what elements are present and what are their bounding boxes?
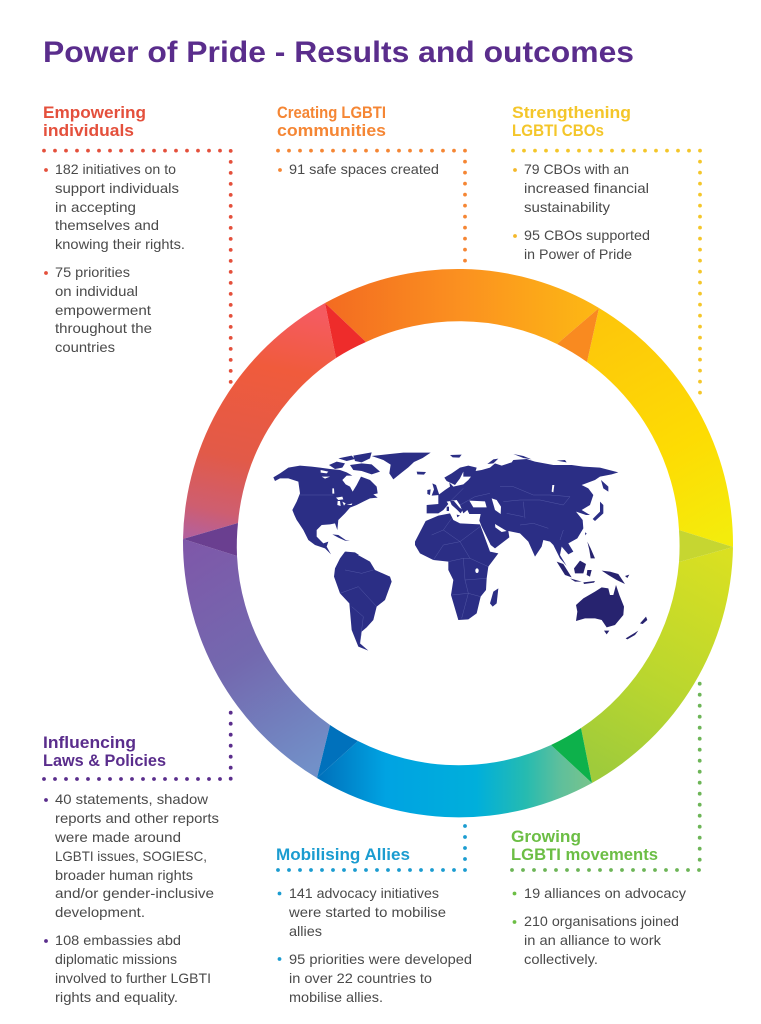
bullet list: in over 22 countries to: [289, 970, 432, 986]
bullet list: empowerment: [55, 302, 151, 318]
ring segment: lime: [581, 547, 733, 783]
Africa: [415, 513, 498, 620]
heading: [277, 103, 386, 140]
ring fold: orange: [557, 308, 599, 362]
heading: individuals: [43, 121, 134, 140]
bullet list: and/or gender-inclusive: [55, 885, 214, 901]
heading: [43, 103, 146, 140]
country borders: [300, 487, 570, 643]
bullet list: knowing their rights.: [55, 236, 185, 252]
bullet list: diplomatic missions: [55, 951, 177, 967]
bullet list: 91 safe spaces created: [289, 161, 439, 177]
bullet list: [44, 161, 185, 355]
world map: [257, 452, 647, 651]
panel: creating LGBTI communities: [277, 103, 439, 177]
heading: Influencing: [43, 733, 136, 752]
North America: [257, 452, 380, 555]
ring fold: lime: [679, 530, 733, 562]
Oceania and Southeast Asia: [557, 542, 647, 639]
ring segment: purple: [183, 539, 330, 778]
panel: strengthening LGBTI CBOs: [512, 103, 650, 262]
bullet list: 95 priorities were developed: [289, 951, 472, 967]
bullet list: themselves and: [55, 217, 159, 233]
panel: growing LGBTI movements: [511, 827, 686, 967]
heading: [43, 733, 166, 770]
heading: Strengthening: [512, 103, 631, 122]
bullet list: throughout the: [55, 320, 152, 336]
bullet list: increased financial: [524, 180, 649, 196]
bullet list: 79 CBOs with an: [524, 161, 629, 177]
panel: mobilising allies: [276, 845, 472, 1005]
panel: empowering individuals: [43, 103, 185, 355]
heading: communities: [277, 121, 386, 140]
bullet list: were made around: [54, 829, 181, 845]
heading: Laws & Policies: [43, 751, 166, 770]
bullet list: [44, 791, 219, 1005]
bullet list: 40 statements, shadow: [55, 791, 209, 807]
bullet list: support individuals: [55, 180, 179, 196]
dotted connector: influencing laws: [44, 702, 231, 779]
bullet list: LGBTI issues, SOGIESC,: [55, 848, 207, 864]
ring fold: purple: [183, 523, 238, 556]
bullet list: 95 CBOs supported: [524, 227, 650, 243]
title: Power of Pride - Results and outcomes: [43, 36, 634, 69]
heading: [511, 827, 658, 864]
bullet list: broader human rights: [55, 867, 193, 883]
dotted connector: strengthening CBOs: [513, 151, 700, 403]
ring fold: green: [551, 728, 592, 783]
bullet list: [513, 885, 686, 967]
bullet list: in accepting: [55, 199, 136, 215]
Iceland: [417, 472, 426, 475]
heading: Empowering: [43, 103, 146, 122]
heading: Mobilising Allies: [276, 845, 410, 864]
bullet list: development.: [55, 904, 145, 920]
bullet list: rights and equality.: [55, 989, 178, 1005]
British Isles: [432, 483, 439, 496]
Italy: [450, 501, 463, 513]
bullet list: collectively.: [524, 951, 598, 967]
bullet list: mobilise allies.: [289, 989, 383, 1005]
bullet list: 141 advocacy initiatives: [289, 885, 439, 901]
heading: LGBTI movements: [511, 845, 658, 864]
Eurasia: [427, 459, 618, 566]
ring segment: blue: [317, 741, 592, 817]
dotted connector: growing movements: [512, 683, 700, 870]
dotted connector: empowering individuals: [44, 151, 231, 384]
heading: Growing: [511, 827, 581, 846]
colour ring: [183, 269, 733, 817]
Mediterranean islands: [447, 507, 449, 511]
bullet list: allies: [289, 923, 322, 939]
bullet list: in an alliance to work: [524, 932, 662, 948]
bullet list: were started to mobilise: [288, 904, 446, 920]
heading: Creating LGBTI: [277, 103, 386, 122]
bullet list: 108 embassies abd: [55, 932, 181, 948]
heading: LGBTI CBOs: [512, 121, 604, 140]
heading: [512, 103, 631, 140]
bullet list: involved to further LGBTI: [55, 970, 211, 986]
Madagascar: [490, 588, 498, 607]
panel: influencing laws and policies: [43, 733, 219, 1005]
bullet list: reports and other reports: [55, 810, 219, 826]
ring segment: red: [183, 303, 336, 539]
bullet list: [513, 161, 650, 262]
South America: [334, 552, 392, 651]
seas and lakes: [295, 470, 554, 573]
Sakhalin and Japan: [601, 480, 608, 492]
dotted connector: mobilising allies: [278, 822, 465, 870]
ring segment: yellow: [587, 308, 733, 547]
bullet list: 75 priorities: [55, 264, 130, 280]
ring fold: blue: [317, 725, 358, 778]
ring segment: orange: [325, 269, 599, 344]
Greenland: [372, 453, 431, 479]
bullet list: 19 alliances on advocacy: [524, 885, 686, 901]
bullet list: countries: [55, 339, 115, 355]
bullet list: on individual: [55, 283, 138, 299]
Svalbard: [450, 455, 462, 458]
bullet list: [278, 885, 472, 1005]
bullet list: 210 organisations joined: [524, 913, 679, 929]
bullet list: 182 initiatives on to: [55, 161, 176, 177]
Arctic Russia: [513, 454, 532, 459]
dotted connector: creating communities: [278, 151, 465, 263]
bullet list: in Power of Pride: [524, 246, 632, 262]
ring fold: red: [325, 303, 366, 358]
bullet list: sustainability: [524, 199, 610, 215]
